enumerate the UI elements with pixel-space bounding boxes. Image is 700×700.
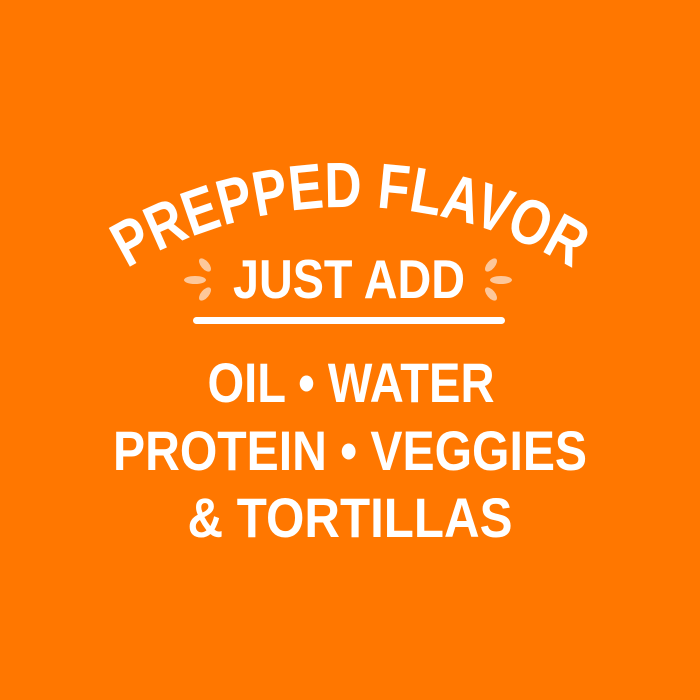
divider line bbox=[193, 317, 505, 324]
ingredients text block: OIL • WATER bbox=[208, 351, 494, 414]
title: arced Prepped Flavor: PREPPED FLAVOR bbox=[108, 163, 588, 268]
heading: Just Add: JUST ADD bbox=[233, 248, 465, 310]
ingredients text block: PROTEIN • VEGGIES bbox=[113, 419, 587, 482]
ingredients text block: & TORTILLAS bbox=[188, 486, 512, 549]
icon: right sparkle bbox=[483, 256, 512, 303]
icon: left sparkle bbox=[184, 256, 213, 303]
ingredients text block bbox=[113, 351, 587, 549]
